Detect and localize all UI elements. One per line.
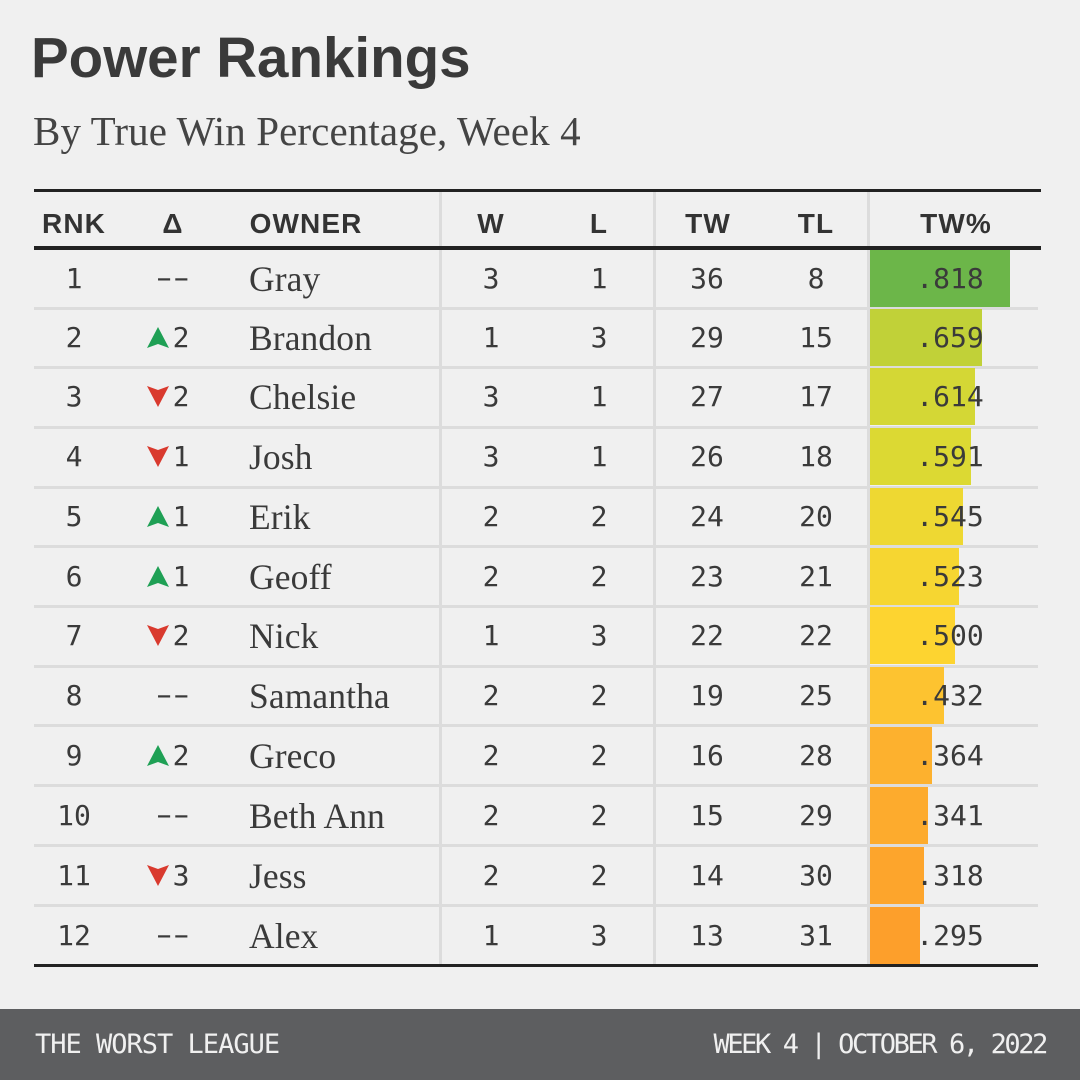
row: Brandon: 2 xyxy=(173,321,189,354)
row: Samantha: 25 xyxy=(799,679,833,712)
table header: OWNER xyxy=(250,208,362,239)
row: Brandon: Brandon xyxy=(249,318,372,358)
row: Samantha: .432 xyxy=(916,679,984,712)
row: Gray: 1 xyxy=(66,262,82,295)
row: Chelsie: 27 xyxy=(690,380,724,413)
table header: W xyxy=(477,208,505,239)
row: Beth Ann: .341 xyxy=(916,799,984,832)
row: Brandon xyxy=(66,309,984,366)
table header: TW xyxy=(685,208,731,239)
subtitle: By True Win Percentage, Week 4 xyxy=(33,108,581,154)
row: Chelsie: 2 xyxy=(173,380,189,413)
row: Brandon: 2 xyxy=(66,321,82,354)
row: Samantha: Samantha xyxy=(249,676,390,716)
row: Brandon: .659 xyxy=(916,321,984,354)
row: Nick: Nick xyxy=(249,616,318,656)
row: Alex: 31 xyxy=(799,919,833,952)
icon: up arrow xyxy=(147,327,169,348)
icon: up arrow xyxy=(147,745,169,766)
row: Beth Ann: -- xyxy=(150,798,184,831)
row: Jess: Jess xyxy=(249,856,307,896)
row: Greco: 2 xyxy=(591,739,607,772)
table header: TW% xyxy=(920,208,992,239)
row: Nick xyxy=(66,607,984,664)
row: Gray: -- xyxy=(150,261,184,294)
icon: down arrow xyxy=(147,446,169,467)
row: Alex: .295 xyxy=(916,919,984,952)
row: Beth Ann: 2 xyxy=(591,799,607,832)
icon: up arrow xyxy=(147,566,169,587)
row: Geoff: 23 xyxy=(690,560,724,593)
row: Chelsie: .614 xyxy=(916,380,984,413)
row: Beth Ann: Beth Ann xyxy=(249,796,385,836)
row: Erik: 2 xyxy=(483,500,499,533)
row: Samantha: 8 xyxy=(66,679,82,712)
row: Alex: 12 xyxy=(57,919,91,952)
row: Geoff xyxy=(66,548,984,605)
icon: down arrow xyxy=(147,865,169,886)
row: Brandon: 29 xyxy=(690,321,724,354)
row: Greco: 28 xyxy=(799,739,833,772)
row: Alex: -- xyxy=(150,918,184,951)
row: Beth Ann: 10 xyxy=(57,799,91,832)
row: Josh: 1 xyxy=(591,440,607,473)
row: Josh: 18 xyxy=(799,440,833,473)
row: Erik: 20 xyxy=(799,500,833,533)
row: Samantha: -- xyxy=(150,678,184,711)
row: Nick: 22 xyxy=(690,619,724,652)
row: Erik: Erik xyxy=(249,497,311,537)
title: Power Rankings xyxy=(31,26,471,89)
icon: down arrow xyxy=(147,625,169,646)
row: Erik: 24 xyxy=(690,500,724,533)
row: Jess xyxy=(57,847,984,904)
row: Geoff: 6 xyxy=(66,560,82,593)
row: Chelsie: Chelsie xyxy=(249,377,356,417)
row: Jess: .318 xyxy=(916,859,984,892)
row: Chelsie: 17 xyxy=(799,380,833,413)
row: Chelsie xyxy=(66,368,984,425)
row: Geoff: 2 xyxy=(591,560,607,593)
row: Geoff: .523 xyxy=(916,560,984,593)
row: Nick: 2 xyxy=(173,619,189,652)
row: Nick: .500 xyxy=(916,619,984,652)
row: Jess: 3 xyxy=(173,859,189,892)
row: Greco: 16 xyxy=(690,739,724,772)
row: Erik: 5 xyxy=(66,500,82,533)
row: Alex: 3 xyxy=(591,919,607,952)
table header: Δ xyxy=(162,208,184,239)
row: Josh: 4 xyxy=(66,440,82,473)
row: Greco: .364 xyxy=(916,739,984,772)
row: Beth Ann xyxy=(57,787,984,844)
row: Gray: 1 xyxy=(591,262,607,295)
row: Nick: 22 xyxy=(799,619,833,652)
row: Beth Ann: 15 xyxy=(690,799,724,832)
row: Geoff: 1 xyxy=(173,560,189,593)
row: Erik: .545 xyxy=(916,500,984,533)
row: Jess: 14 xyxy=(690,859,724,892)
row: Jess: 2 xyxy=(483,859,499,892)
table header xyxy=(42,208,992,239)
row: Alex: 1 xyxy=(483,919,499,952)
row: Chelsie: 3 xyxy=(483,380,499,413)
row: Nick: 1 xyxy=(483,619,499,652)
row: Gray: .818 xyxy=(916,262,984,295)
row: Alex xyxy=(57,907,984,964)
row: Greco: 9 xyxy=(66,739,82,772)
row: Chelsie: 1 xyxy=(591,380,607,413)
row: Greco: 2 xyxy=(483,739,499,772)
row: Gray xyxy=(66,250,1010,307)
row: Josh: Josh xyxy=(249,437,313,477)
row: Alex: 13 xyxy=(690,919,724,952)
row: Jess: 30 xyxy=(799,859,833,892)
row: Nick: 7 xyxy=(66,619,82,652)
row: Greco: Greco xyxy=(249,736,336,776)
row: Beth Ann: 2 xyxy=(483,799,499,832)
row: Erik xyxy=(66,488,984,545)
row: Jess: 11 xyxy=(57,859,91,892)
row: Samantha: 2 xyxy=(591,679,607,712)
footer bar xyxy=(0,1009,1080,1080)
row: Samantha: 19 xyxy=(690,679,724,712)
row: Gray: 8 xyxy=(808,262,824,295)
footer left text: THE WORST LEAGUE xyxy=(35,1029,279,1060)
row: Jess: 2 xyxy=(591,859,607,892)
row: Greco: 2 xyxy=(173,739,189,772)
row: Geoff: Geoff xyxy=(249,557,332,597)
row: Geoff: 21 xyxy=(799,560,833,593)
row: Samantha xyxy=(66,667,984,724)
row: Josh: 1 xyxy=(173,440,189,473)
table header: RNK xyxy=(42,208,106,239)
row: Nick: 3 xyxy=(591,619,607,652)
table header: TL xyxy=(798,208,834,239)
row: Josh xyxy=(66,428,984,485)
row: Gray: Gray xyxy=(249,259,320,299)
row: Erik: 2 xyxy=(591,500,607,533)
row: Chelsie: 3 xyxy=(66,380,82,413)
row: Brandon: 1 xyxy=(483,321,499,354)
row: Greco xyxy=(66,727,984,784)
row: Samantha: 2 xyxy=(483,679,499,712)
icon: up arrow xyxy=(147,506,169,527)
table header: L xyxy=(590,208,608,239)
row: Gray: 36 xyxy=(690,262,724,295)
icon: down arrow xyxy=(147,386,169,407)
footer right text: WEEK 4 | OCTOBER 6, 2022 xyxy=(713,1029,1046,1060)
row: Josh: .591 xyxy=(916,440,984,473)
row: Josh: 26 xyxy=(690,440,724,473)
row: Geoff: 2 xyxy=(483,560,499,593)
row: Erik: 1 xyxy=(173,500,189,533)
row: Alex: Alex xyxy=(249,916,318,956)
row: Beth Ann: 29 xyxy=(799,799,833,832)
row: Josh: 3 xyxy=(483,440,499,473)
row: Brandon: 15 xyxy=(799,321,833,354)
row: Gray: 3 xyxy=(483,262,499,295)
row: Brandon: 3 xyxy=(591,321,607,354)
